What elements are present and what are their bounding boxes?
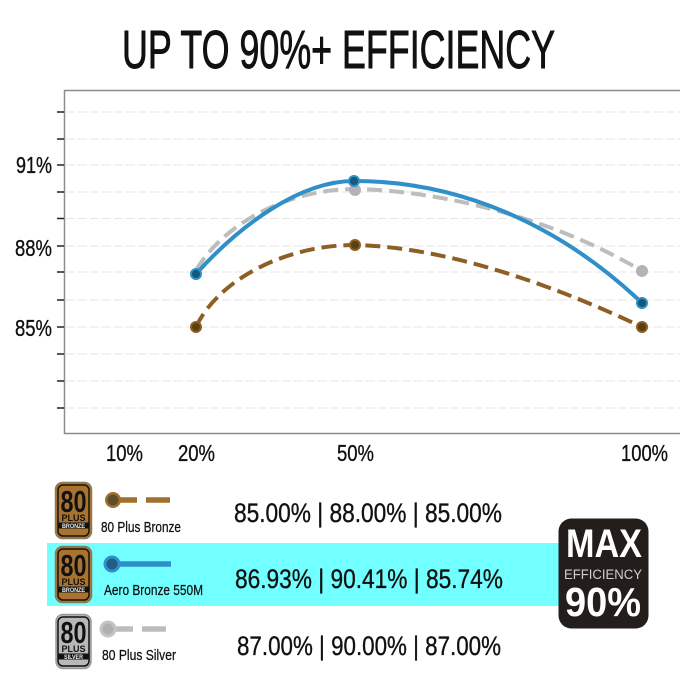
badge: 80 Plus Bronze (56, 482, 92, 538)
highlight band: Aero Bronze row (47, 543, 577, 606)
values: 86.93% | 90.41% | 85.74% (235, 564, 503, 594)
x axis labels (106, 440, 668, 466)
x axis labels: 20% (178, 440, 215, 466)
y axis labels (15, 152, 52, 341)
legend key: silver dashed line (100, 620, 166, 638)
x axis labels: 50% (337, 440, 374, 466)
series: Aero Bronze 550M (191, 176, 647, 308)
badge: max efficiency 90% (558, 518, 648, 628)
badge: Aero Bronze: 80 (60, 548, 86, 583)
legend label: 80 Plus Bronze (101, 519, 181, 536)
legend label: Aero Bronze 550M (104, 582, 203, 599)
badge: 80 Plus Silver: SILVER (64, 655, 84, 661)
legend key: bronze dashed line (105, 492, 170, 508)
badge: max efficiency 90%: 90% (565, 579, 641, 625)
badge: 80 Plus Bronze: PLUS (62, 513, 86, 523)
y axis labels: 85% (15, 315, 52, 341)
x axis labels: 100% (621, 440, 668, 466)
badge: Aero Bronze: BRONZE (62, 588, 85, 594)
badge: 80 Plus Silver: 80 (60, 615, 86, 650)
legend row: 80 Plus Silver (56, 614, 501, 668)
line chart: efficiency by load (15, 90, 680, 466)
badge: Aero Bronze (56, 546, 92, 602)
legend row: Aero Bronze 550M (56, 546, 503, 602)
values: 85.00% | 88.00% | 85.00% (234, 498, 502, 528)
badge: 80 Plus Silver: PLUS (62, 644, 86, 654)
series: 80 Plus Silver (196, 184, 648, 277)
badge: 80 Plus Bronze: 80 (60, 484, 86, 519)
legend label: 80 Plus Silver (102, 647, 176, 664)
legend key: blue solid line (104, 556, 171, 572)
badge: 80 Plus Silver (56, 614, 91, 668)
values: 87.00% | 90.00% | 87.00% (237, 631, 501, 661)
y axis labels: 91% (16, 152, 52, 178)
badge: 80 Plus Bronze: BRONZE (62, 524, 85, 530)
x axis labels: 10% (106, 440, 143, 466)
legend row: 80 Plus Bronze (56, 482, 502, 538)
badge: max efficiency 90%: MAX (566, 522, 642, 566)
badge: Aero Bronze: PLUS (62, 577, 86, 587)
y axis labels: 88% (15, 235, 52, 261)
series: 80 Plus Bronze (191, 240, 647, 332)
badge: max efficiency 90%: EFFICIENCY (564, 567, 642, 582)
